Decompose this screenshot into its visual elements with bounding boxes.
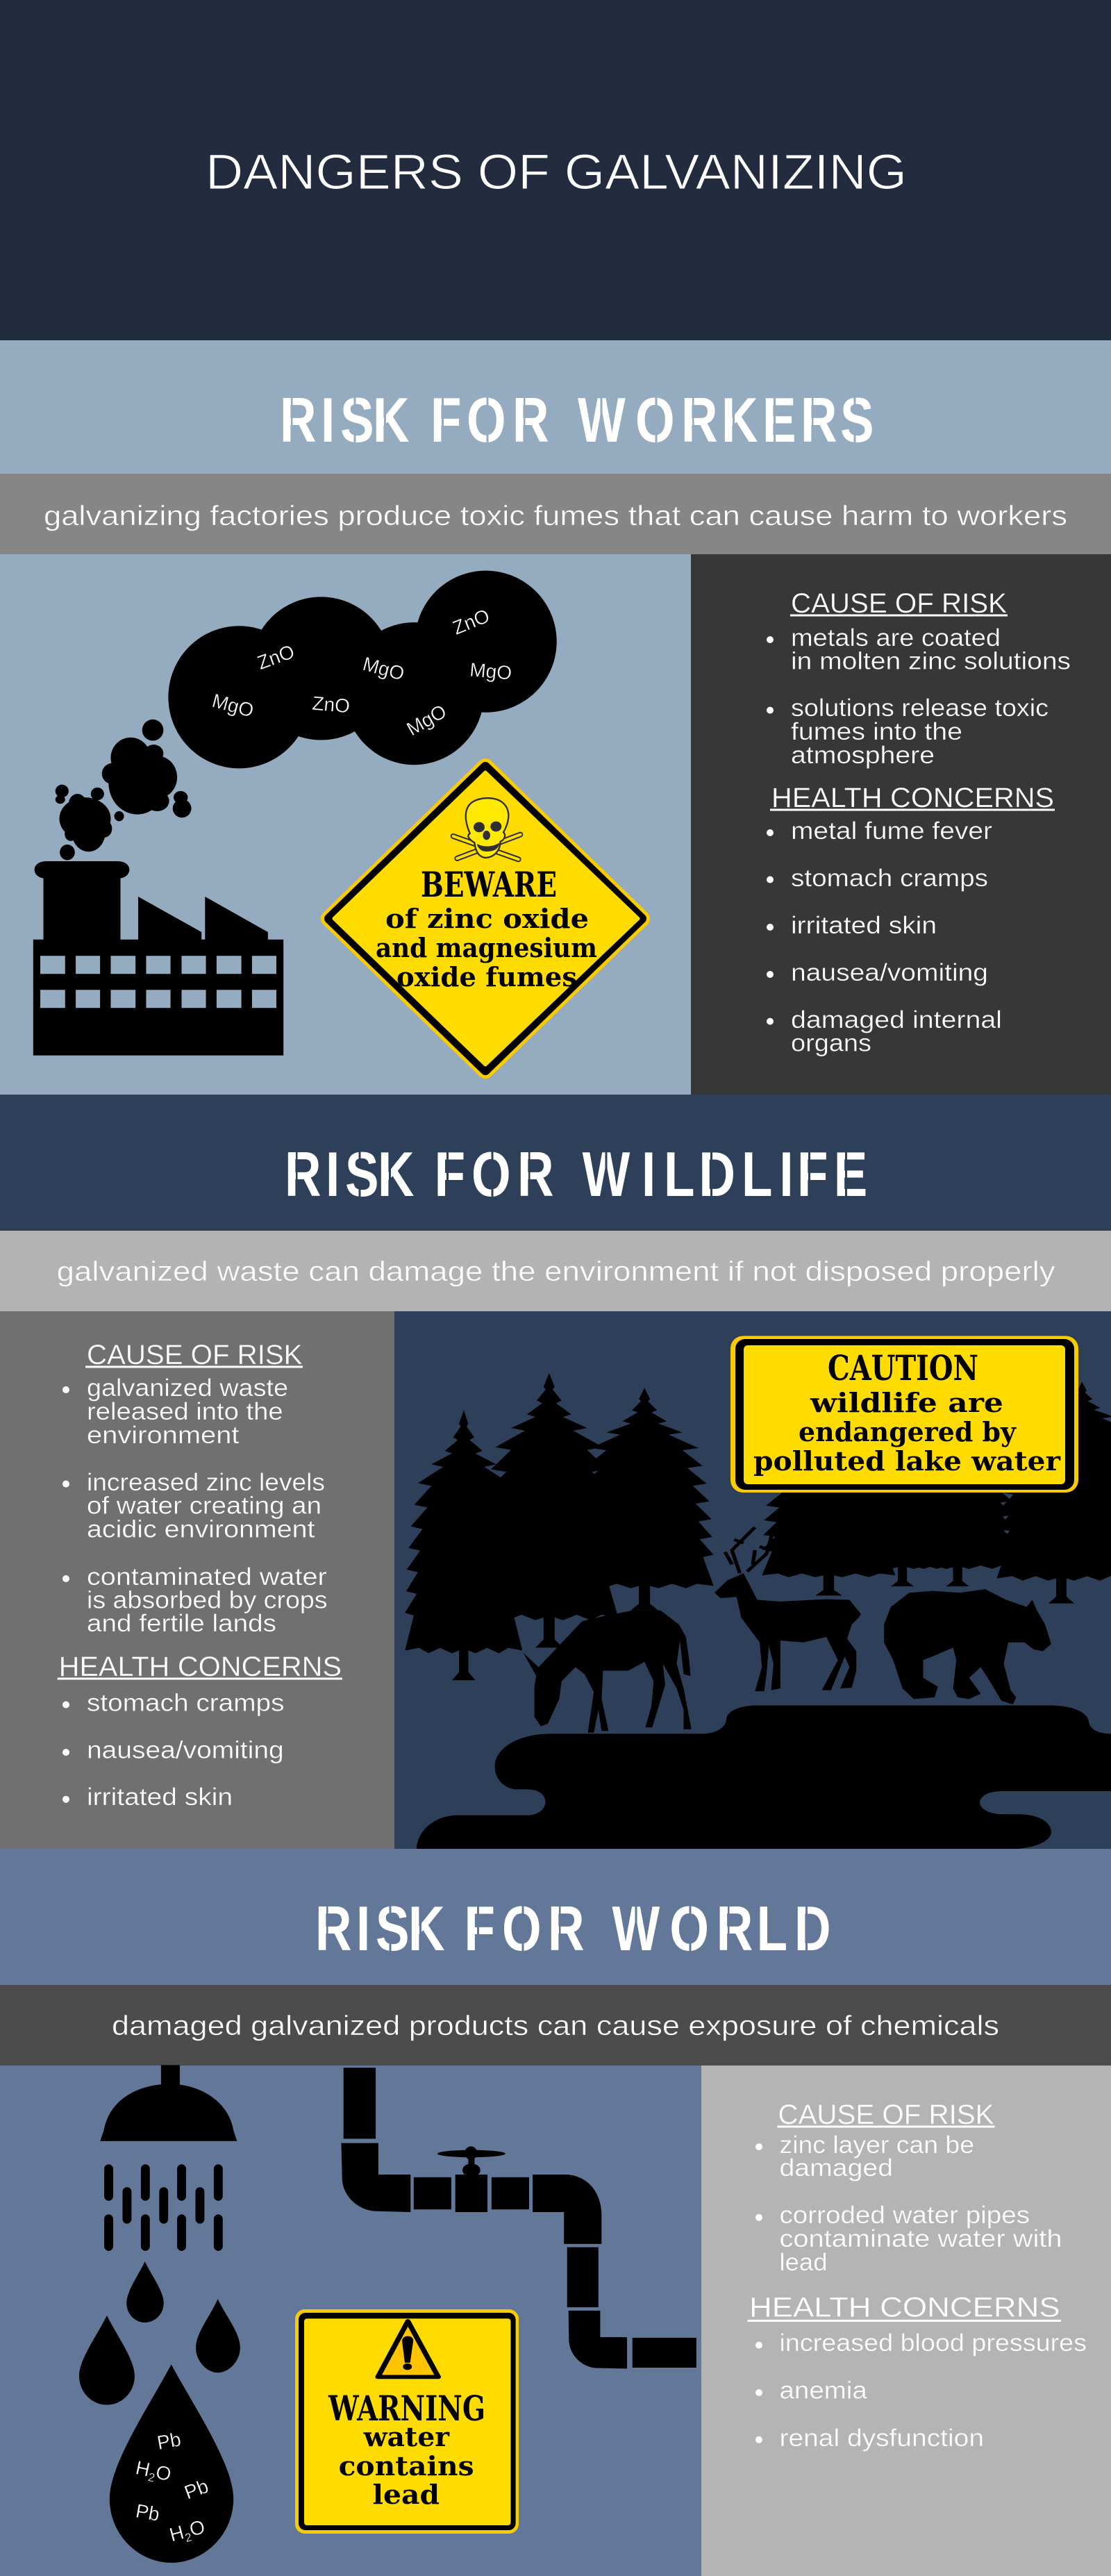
list: causes: released into the <box>87 1398 283 1425</box>
panel: workers text <box>691 554 1111 1095</box>
icon: toxic fume cloud: MgO <box>469 658 512 684</box>
list: health concerns: stomach cramps <box>87 1690 285 1717</box>
subtitle band: wildlife: galvanized waste can damage the environment if not disposed properly <box>57 1256 1055 1287</box>
panel: world text <box>701 2066 1111 2576</box>
icon: large contaminated drop <box>110 2364 233 2563</box>
icon: grazing horse <box>524 1611 692 1733</box>
list: health concerns: damaged internal <box>791 1006 1002 1033</box>
panel: world illustration <box>0 2065 701 2576</box>
list: health concerns: stomach cramps <box>791 865 988 892</box>
sign: beware diamond: BEWARE <box>421 864 557 905</box>
list: causes: acidic environment <box>87 1516 315 1543</box>
list: health concerns <box>767 817 1002 1057</box>
heading: health concerns: HEALTH CONCERNS <box>59 1652 342 1682</box>
list: causes: corroded water pipes <box>779 2202 1030 2229</box>
sign: warning: water <box>363 2421 450 2452</box>
icon: lake of polluted water <box>417 1706 1111 1849</box>
icon: toxic fume cloud: MgO <box>360 653 407 685</box>
list: causes <box>62 1374 328 1637</box>
sign: beware diamond: of zinc oxide <box>385 903 589 934</box>
list: health concerns: organs <box>791 1029 871 1057</box>
heading: health concerns: HEALTH CONCERNS <box>771 783 1054 813</box>
sign: beware diamond <box>329 767 642 1070</box>
icon: water pipe with valve <box>341 2068 696 2368</box>
list: causes: of water creating an <box>87 1492 321 1520</box>
icon: pine forest <box>405 1373 1111 1680</box>
section: risk for world <box>0 1849 1111 2576</box>
heading: cause of risk: CAUSE OF RISK <box>87 1340 303 1370</box>
list: health concerns <box>755 2329 1087 2452</box>
icon: large contaminated drop: Pb <box>181 2475 211 2503</box>
list: health concerns: anemia <box>779 2377 867 2404</box>
heading band: risk for workers <box>0 340 1111 474</box>
list: health concerns: irritated skin <box>87 1784 233 1811</box>
sign: caution <box>730 1336 1078 1493</box>
panel: workers illustration <box>0 554 691 1095</box>
list: causes: lead <box>779 2249 828 2276</box>
icon: toxic fume cloud: MgO <box>210 690 256 722</box>
list: causes: galvanized waste <box>87 1374 288 1402</box>
icon: warning triangle <box>378 2321 438 2377</box>
list: causes: is absorbed by crops <box>87 1587 328 1614</box>
sign: warning: lead <box>372 2479 440 2510</box>
panel: wildlife illustration <box>394 1311 1111 1849</box>
heading: health concerns: HEALTH CONCERNS <box>749 2292 1060 2322</box>
list: causes <box>767 624 1071 769</box>
sign: beware diamond: and magnesium <box>376 932 597 963</box>
icon: factory <box>33 861 283 1056</box>
section: risk for workers <box>0 340 1111 1095</box>
subtitle band: wildlife <box>0 1231 1111 1311</box>
icon: bear <box>884 1589 1051 1704</box>
list: health concerns: nausea/vomiting <box>87 1736 284 1764</box>
section: risk for wildlife <box>0 1095 1111 1849</box>
list: causes <box>755 2132 1062 2276</box>
list: causes: fumes into the <box>791 718 962 745</box>
list: causes: solutions release toxic <box>791 695 1049 722</box>
heading band: risk for world <box>0 1849 1111 1985</box>
list: causes: metals are coated <box>791 624 1001 651</box>
icon: large contaminated drop: O <box>154 2461 173 2485</box>
list: health concerns <box>62 1690 285 1811</box>
icon: smoke puffs <box>56 720 192 860</box>
heading band: risk for wildlife: RISK FOR WILDLIFE <box>285 1139 867 1210</box>
icon: large contaminated drop: Pb <box>156 2428 183 2454</box>
icon: deer <box>715 1527 861 1691</box>
sign: caution: CAUTION <box>828 1347 978 1388</box>
icon: large contaminated drop: 2 <box>183 2530 193 2545</box>
icon: toxic fume cloud: ZnO <box>254 640 297 674</box>
heading band: risk for workers: RISK FOR WORKERS <box>280 385 874 456</box>
subtitle band: world: damaged galvanized products can cause exposure of chemicals <box>112 2011 999 2041</box>
icon: toxic fume cloud <box>168 571 557 768</box>
list: health concerns: nausea/vomiting <box>791 959 988 986</box>
icon: toxic fume cloud: MgO <box>403 700 450 740</box>
title: DANGERS OF GALVANIZING <box>206 145 907 200</box>
subtitle band: workers <box>0 474 1111 554</box>
list: causes: in molten zinc solutions <box>791 647 1071 675</box>
heading band: risk for wildlife <box>0 1095 1111 1231</box>
list: causes: contaminated water <box>87 1563 327 1590</box>
heading: cause of risk: CAUSE OF RISK <box>791 588 1007 619</box>
list: health concerns: increased blood pressures <box>779 2329 1087 2357</box>
sign: warning: contains <box>339 2450 474 2482</box>
icon: large contaminated drop: H <box>134 2457 152 2481</box>
list: causes: contaminate water with <box>779 2225 1062 2252</box>
list: health concerns: metal fume fever <box>791 817 992 845</box>
subtitle band: world <box>0 1985 1111 2066</box>
icon: large contaminated drop: 2 <box>147 2470 156 2485</box>
sign: caution: wildlife are <box>810 1387 1003 1418</box>
sign: warning: WARNING <box>328 2388 485 2429</box>
subtitle band: workers: galvanizing factories produce toxic fumes that can cause harm to workers <box>44 501 1067 531</box>
sign: warning <box>295 2309 519 2534</box>
heading band: risk for world: RISK FOR WORLD <box>315 1893 831 1964</box>
icon: toxic fume cloud: ZnO <box>449 605 492 639</box>
icon: water drops <box>79 2261 240 2405</box>
icon: large contaminated drop: Pb <box>134 2500 161 2525</box>
icon: toxic fume cloud: ZnO <box>311 692 351 717</box>
heading: cause of risk: CAUSE OF RISK <box>778 2100 994 2130</box>
sign: beware diamond: oxide fumes <box>396 961 577 992</box>
list: causes: atmosphere <box>791 742 935 769</box>
list: causes: zinc layer can be <box>779 2132 974 2159</box>
list: health concerns: renal dysfunction <box>779 2425 984 2452</box>
list: causes: and fertile lands <box>87 1610 276 1637</box>
panel: wildlife text <box>0 1311 394 1849</box>
list: health concerns: irritated skin <box>791 912 937 939</box>
list: causes: increased zinc levels <box>87 1469 325 1496</box>
icon: shower head <box>100 2065 237 2251</box>
sign: caution: polluted lake water <box>753 1445 1061 1477</box>
sign: caution: endangered by <box>799 1416 1017 1447</box>
title banner <box>0 0 1111 340</box>
icon: large contaminated drop: O <box>187 2516 207 2541</box>
list: causes: damaged <box>779 2154 893 2182</box>
list: causes: environment <box>87 1422 240 1449</box>
icon: large contaminated drop: H <box>167 2521 186 2545</box>
icon: skull and crossbones <box>453 798 520 859</box>
